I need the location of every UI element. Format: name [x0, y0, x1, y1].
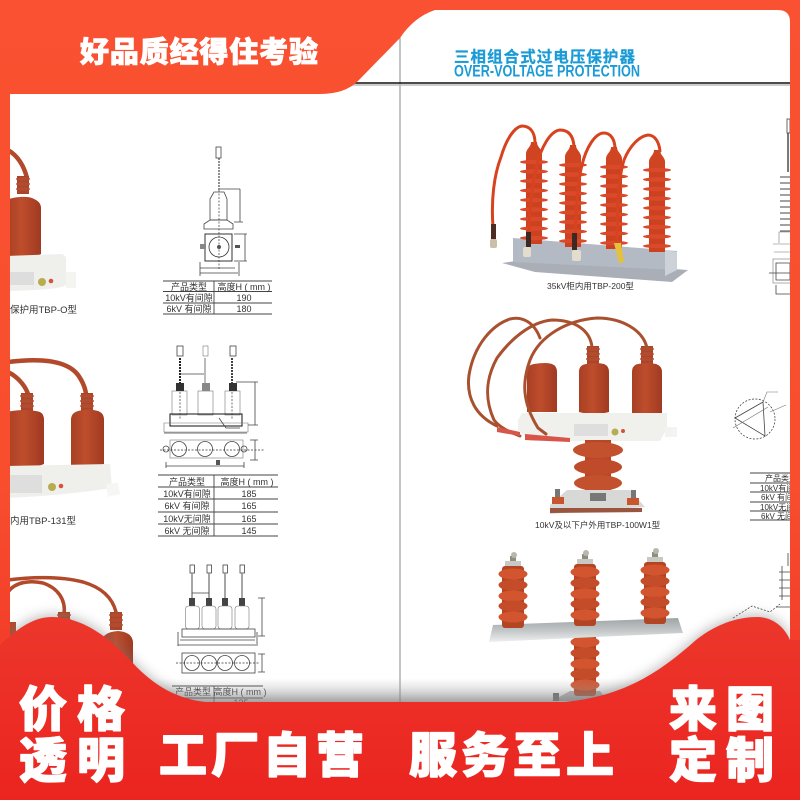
table: right side cropped: 6kV 有间: [761, 492, 793, 502]
table: four-pole heights: 产品类型: [175, 686, 211, 697]
drawing: four-pole dimensions: [176, 565, 265, 673]
table: TBP-131 heights: [158, 475, 278, 536]
caption: TBP-200: 35kV柜内用TBP-200型: [547, 281, 634, 291]
table: TBP-O heights: 产品类型: [171, 281, 207, 292]
table: TBP-O heights: 190: [236, 293, 252, 303]
table: TBP-131 heights: 高度H ( mm ): [220, 476, 274, 487]
caption: TBP-131: 内用TBP-131型: [10, 515, 76, 527]
table: right side cropped: 10kV有间: [760, 483, 794, 493]
table: TBP-131 heights: 产品类型: [169, 476, 205, 487]
banner text: price transparent: [19, 670, 125, 791]
banner text: custom to drawing: 定制: [669, 721, 774, 791]
caption: TBP-O: 保护用TBP-O型: [10, 304, 78, 316]
banner text: factory direct: 工厂自营: [159, 716, 364, 786]
banner text: price transparent: 透明: [19, 721, 125, 791]
drawing: right side triangle: [733, 392, 786, 439]
drawing: TBP-131 dimensions: [160, 346, 265, 468]
table: TBP-O heights: 10kV有间隙: [165, 292, 213, 303]
banner text: custom to drawing: [669, 670, 774, 791]
product photo: TBP-200 four columns: [490, 126, 688, 282]
table: TBP-131 heights: 145: [241, 526, 257, 536]
header tab title: 好品质经得住考验: [80, 29, 318, 71]
table: TBP-131 heights: 6kV 有间隙: [164, 500, 210, 511]
product photo: TBP-O: [6, 150, 76, 291]
left column divider and header rule: [340, 30, 790, 705]
table: TBP-131 heights: 165: [241, 501, 257, 511]
drawing: TBP-O dimensions: [200, 147, 247, 276]
table: TBP-O heights: [163, 281, 272, 314]
product title: [454, 45, 640, 80]
drawing: right side cropped bottom: [733, 553, 790, 618]
banner text: service first: 服务至上: [409, 716, 614, 786]
table: four-pole heights: 高度H ( mm ): [214, 686, 266, 697]
banner text: custom to drawing: 来图: [669, 670, 774, 740]
table: TBP-O heights: 180: [236, 304, 252, 314]
product photo: three arresters on bar: [489, 548, 683, 701]
table: right side cropped: 6kV 无间: [761, 512, 793, 521]
table: right side cropped: 产品类型: [765, 473, 797, 483]
product photo: four-pole cables: [6, 578, 133, 702]
table: TBP-131 heights: 6kV 无间隙: [164, 525, 210, 536]
table: four-pole heights: 135: [233, 698, 249, 708]
drawing: right side cropped top: [769, 119, 791, 294]
product title: OVER-VOLTAGE PROTECTION: [454, 62, 640, 80]
product photo: TBP-100W1: [468, 318, 677, 514]
table: TBP-131 heights: 165: [241, 514, 257, 524]
table: TBP-131 heights: 185: [241, 489, 257, 499]
table: four-pole heights: [172, 686, 266, 708]
table: TBP-131 heights: 10kV无间隙: [163, 513, 211, 524]
banner text: price transparent: 价格: [19, 670, 125, 740]
table: right side cropped: 10kV无间: [760, 503, 794, 512]
caption: TBP-100W1: 10kV及以下户外用TBP-100W1型: [535, 520, 661, 530]
table: right side cropped: [750, 473, 797, 521]
table: TBP-131 heights: 10kV有间隙: [163, 488, 211, 499]
bottom shadow: [0, 615, 800, 758]
product title: 三相组合式过电压保护器: [454, 45, 635, 67]
bottom red banner: [0, 617, 800, 800]
table: TBP-O heights: 高度H ( mm ): [218, 281, 270, 292]
table: TBP-O heights: 6kV 有间隙: [166, 303, 212, 314]
product photo: TBP-131: [6, 360, 120, 498]
